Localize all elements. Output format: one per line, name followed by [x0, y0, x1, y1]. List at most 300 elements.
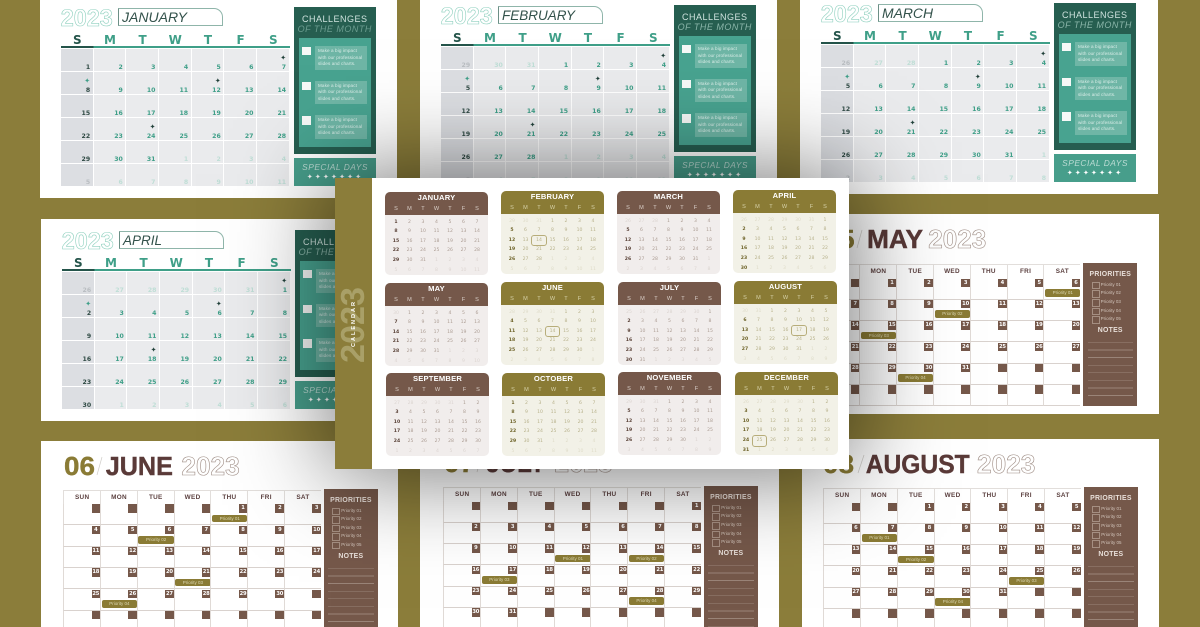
date grid: Priority 03: [1016, 578, 1037, 583]
mini calendar: December: 22: [811, 428, 816, 433]
date grid: 1: [120, 402, 124, 409]
mini calendar: June: 16: [577, 329, 582, 334]
date grid: 29: [889, 365, 895, 371]
mini calendar: September: 2: [409, 449, 412, 454]
mini calendar: April: 29: [782, 218, 787, 222]
mini calendar: January: 8: [435, 268, 438, 273]
mini calendar: June: 6: [538, 319, 540, 324]
date grid: Priority 02: [636, 556, 657, 561]
sidebar: challenges of the month: CHALLENGES: [682, 12, 748, 22]
mini calendar: July: 27: [653, 310, 659, 314]
mini calendar: November: 16: [680, 419, 686, 424]
mini calendar: May: 29: [407, 349, 412, 354]
mini calendar: November: W: [667, 386, 672, 392]
date grid: 6: [283, 402, 287, 409]
mini calendar: May: 10: [474, 359, 480, 364]
mini calendar: August: 23: [783, 337, 788, 342]
date grid: 24: [625, 131, 633, 138]
mini calendar: February: S: [591, 204, 595, 210]
date grid: 21: [889, 568, 896, 574]
weekday header: [443, 487, 701, 501]
date grid: 8: [241, 527, 245, 533]
mini calendar: October: 11: [551, 410, 556, 415]
panel: June calendar: [41, 441, 398, 627]
date grid: 10: [625, 177, 633, 184]
date grid: [63, 504, 321, 627]
special days box: [1054, 154, 1136, 182]
date grid: 31: [147, 156, 155, 163]
date grid: 28: [277, 133, 286, 140]
mini calendar: January: 10: [420, 229, 426, 234]
date grid: 6: [498, 177, 503, 184]
mini calendar: November: 24: [694, 428, 699, 433]
date grid: 14: [852, 322, 859, 328]
mini calendar: June: 17: [590, 329, 596, 334]
date grid: 27: [874, 60, 883, 67]
sidebar: challenges of the month: Make a big impact: [319, 306, 358, 311]
mini calendar: February: 16: [563, 238, 569, 243]
mini calendar: May: S: [394, 296, 398, 302]
date grid: 7: [531, 85, 535, 92]
sidebar: challenges of the month: OF THE MONTH: [1058, 20, 1132, 30]
sidebar: challenges of the month: with our professional: [698, 87, 742, 92]
mini calendar: October: 11: [591, 449, 597, 454]
mini calendar: April: 20: [795, 246, 801, 251]
mini calendar: November: 6: [668, 448, 671, 453]
mini calendar: August: 25: [810, 337, 815, 342]
mini calendar: June: 7: [578, 358, 581, 363]
date grid: 3: [629, 154, 633, 161]
mini calendar: June: 2: [511, 358, 513, 363]
date grid: 29: [926, 589, 933, 595]
mini calendar: February: 11: [590, 267, 596, 272]
date grid: 30: [963, 589, 970, 595]
mini calendar: September: 11: [408, 420, 413, 425]
sidebar: challenges of the month: CHALLENGES: [1062, 10, 1128, 20]
date grid: 4: [1001, 280, 1004, 286]
mini calendar: October: 27: [578, 429, 583, 434]
mini calendar: September: 6: [436, 410, 439, 415]
mini calendar: August: 20: [742, 337, 748, 342]
sidebar: challenges of the month: CHALLENGES: [302, 14, 368, 24]
weekday header: SUN: [75, 494, 89, 501]
mini calendar: February: F: [578, 204, 581, 210]
weekday header: T: [584, 31, 592, 45]
mini calendar: March: 23: [679, 247, 685, 252]
mini calendar: December: 24: [743, 438, 749, 443]
date grid: 11: [657, 177, 666, 184]
date grid: 2: [596, 62, 601, 69]
date grid: 10: [962, 301, 969, 307]
mini calendar: June: 4: [538, 358, 540, 363]
date grid: 8: [184, 179, 188, 186]
mini calendar: July: T: [681, 296, 685, 302]
date grid: 23: [963, 568, 970, 574]
date grid: 27: [874, 152, 883, 159]
mini calendar: July: S: [708, 296, 712, 302]
date grid: [443, 502, 701, 627]
mini calendar: May: 3: [476, 349, 478, 354]
weekday header: [823, 488, 1081, 502]
mini calendar: September: M: [408, 386, 413, 392]
date grid: 16: [83, 356, 91, 363]
mini calendar: March: 2: [627, 267, 629, 272]
weekday header: [74, 256, 279, 270]
date grid: 9: [216, 179, 221, 186]
mini calendar: January: 19: [447, 239, 453, 244]
mini calendar: November: 1: [668, 400, 671, 404]
mini calendar: November: NOVEMBER: [647, 373, 692, 382]
mini calendar: April: 6: [824, 266, 826, 271]
date grid: 14: [656, 545, 663, 551]
sidebar: challenges of the month: with our professional: [698, 122, 742, 127]
mini calendar: April: 22: [822, 246, 828, 251]
date grid: 4: [282, 156, 286, 163]
mini calendar: February: M: [523, 204, 528, 210]
date grid: 1: [695, 503, 698, 509]
panel: August calendar: [802, 439, 1159, 627]
mini calendar: December: 14: [797, 419, 803, 424]
mini calendar: November: 28: [653, 438, 659, 443]
mini calendar: December: 2: [826, 400, 828, 404]
mini calendar: June: 18: [509, 338, 515, 343]
date grid: 21: [852, 344, 859, 350]
mini calendar: December: 5: [772, 409, 774, 414]
mini calendar: March: 1: [708, 257, 710, 262]
mini calendar: February: 9: [565, 267, 567, 272]
mini calendar: July: 12: [667, 329, 672, 334]
date grid: ✦: [84, 77, 90, 85]
weekday header: SUN: [835, 492, 849, 499]
date grid: 19: [583, 567, 590, 573]
date grid: 9: [964, 525, 968, 531]
mini calendar: November: T: [654, 386, 658, 392]
date grid: 2: [216, 156, 221, 163]
mini calendar: October: 8: [552, 449, 555, 454]
date grid: 7: [853, 301, 857, 307]
date grid: 6: [854, 525, 858, 531]
mini calendar: April: 9: [742, 237, 746, 242]
weekday header: SAT: [296, 494, 310, 501]
date grid: 19: [212, 110, 221, 117]
sidebar: priorities and notes: Priority 01: [1101, 282, 1121, 287]
mini calendar: July: 20: [680, 338, 686, 343]
sidebar: challenges of the month: OF THE MONTH: [298, 24, 372, 34]
date grid: ✦: [1040, 50, 1046, 58]
mini calendar: October: 16: [524, 420, 529, 425]
date grid: Priority 01: [563, 556, 583, 561]
sidebar: challenges of the month: CHALLENGES: [303, 237, 369, 247]
mini calendar: June: 3: [592, 310, 594, 314]
date grid: 8: [944, 83, 948, 90]
sidebar: challenges of the month: slides and charts.: [698, 94, 736, 99]
mini calendar: July: 29: [707, 348, 713, 353]
mini calendar: March: 3: [694, 218, 697, 224]
date grid: 23: [972, 129, 981, 136]
mini calendar: April: 24: [755, 256, 760, 261]
date grid: 5: [466, 177, 470, 184]
date grid: 13: [213, 333, 222, 340]
mini calendar: March: 16: [679, 238, 685, 243]
date grid: ✦: [85, 300, 91, 308]
mini calendar: August: 8: [811, 357, 814, 362]
mini calendar: June: 21: [550, 338, 555, 343]
mini calendar: March: 14: [652, 238, 658, 243]
mini calendar: March: 31: [693, 257, 698, 262]
mini calendar: August: F: [811, 294, 814, 300]
date grid: 4: [94, 527, 98, 533]
mini calendar: May: 7: [435, 359, 438, 364]
date grid: 12: [462, 108, 470, 115]
date grid: 17: [625, 108, 633, 115]
sidebar: challenges of the month: slides and charts.: [318, 96, 356, 101]
mini calendar: June: 11: [509, 329, 515, 334]
mini calendar: April: 3: [756, 227, 759, 232]
sidebar: priorities and notes: [1083, 263, 1137, 406]
mini calendar: November: M: [640, 386, 645, 392]
mini calendar: April: 19: [782, 246, 787, 251]
date grid: 4: [548, 524, 551, 530]
mini calendar: June: 10: [590, 319, 596, 324]
mini calendar: November: 13: [640, 419, 645, 424]
mini calendar: October: W: [551, 386, 556, 392]
mini calendar: October: 28: [591, 429, 597, 434]
mini calendar: March: 30: [679, 257, 685, 262]
mini calendar: April: T: [796, 204, 800, 210]
mini calendar: September: T: [422, 386, 426, 392]
date grid: 8: [564, 85, 568, 92]
mini calendar: November: 4: [641, 448, 644, 453]
mini calendar: October: 3: [579, 439, 582, 444]
mini calendar: November: 5: [627, 409, 631, 414]
date grid: 18: [657, 108, 666, 115]
mini calendar: November: 26: [626, 438, 632, 443]
mini calendar: December: 12: [770, 419, 776, 424]
mini calendar: July: 21: [694, 338, 699, 343]
date grid: 28: [852, 365, 859, 371]
date grid: ✦: [464, 75, 470, 83]
mini calendar: November: 3: [695, 400, 698, 404]
mini calendar: August: 11: [810, 318, 815, 323]
mini calendar: June: 25: [509, 348, 515, 353]
sidebar: priorities and notes: PRIORITIES: [1090, 495, 1132, 502]
mini calendar: February: 10: [577, 228, 582, 233]
mini calendar: November: 1: [695, 438, 698, 443]
mini calendar: August: 7: [798, 357, 800, 362]
mini calendar: June: 2: [578, 310, 581, 314]
mini calendar: June: 28: [509, 310, 515, 314]
mini calendar: July: 10: [640, 329, 645, 334]
weekday header: S: [269, 33, 278, 47]
mini calendar: February: 2: [565, 257, 567, 262]
date grid: 29: [940, 152, 948, 159]
weekday header: T: [899, 29, 907, 43]
mini calendar: April: 18: [768, 246, 774, 251]
mini calendar: February: 30: [523, 218, 528, 224]
date grid: 1: [944, 60, 948, 67]
date grid: 7: [282, 64, 286, 71]
date grid: 26: [212, 133, 221, 140]
mini calendar: June: 3: [524, 358, 527, 363]
mini calendar: August: 26: [823, 337, 829, 342]
mini calendar: September: 1: [463, 400, 466, 406]
mini calendar: June: T: [564, 296, 568, 302]
sidebar: priorities and notes: Priority 02: [1101, 290, 1121, 295]
mini calendar: February: 3: [578, 257, 581, 262]
mini calendar: August: 10: [796, 318, 802, 323]
mini calendar: January: 4: [435, 220, 438, 224]
mini calendar: July: 11: [653, 329, 659, 334]
mini calendar: February: 31: [536, 218, 542, 224]
mini calendar: January: 15: [393, 239, 399, 244]
mini calendar: December: M: [757, 386, 762, 392]
mini calendar: December: 3: [744, 409, 748, 414]
date grid: 28: [889, 589, 896, 595]
date grid: 17: [147, 110, 155, 117]
sidebar: 2023 calendar spine: [335, 178, 372, 469]
mini calendar: April: 16: [741, 246, 747, 251]
date grid: 22: [889, 344, 895, 350]
mini calendar: March: 10: [693, 228, 698, 233]
mini calendar: August: T: [797, 294, 801, 300]
mini calendar: January: 1: [435, 258, 438, 263]
mini calendar: November: 20: [640, 428, 645, 433]
date grid: 25: [1037, 129, 1046, 136]
mini calendar: July: 23: [626, 348, 632, 353]
sidebar: challenges of the month: Make a big impact: [1078, 44, 1117, 49]
date grid: Priority 03: [489, 577, 509, 582]
mini calendar: April: APRIL: [773, 191, 796, 200]
date grid: 3: [629, 62, 633, 69]
mini calendar: June: 31: [550, 310, 555, 314]
mini calendar: June: 27: [536, 348, 542, 353]
mini calendar: August: AUGUST: [769, 282, 802, 291]
date grid: 16: [472, 567, 479, 573]
date grid: 8: [86, 87, 90, 94]
mini calendar: June: 9: [578, 319, 581, 324]
weekday header: FRI: [641, 491, 652, 498]
date grid: 28: [203, 591, 210, 597]
mini calendar: March: T: [680, 204, 684, 210]
mini calendar: December: 1: [812, 400, 815, 404]
date grid: 30: [472, 609, 479, 615]
sidebar: challenges of the month: with our professional: [318, 55, 362, 60]
sidebar: challenges of the month: slides and charts.: [319, 284, 357, 289]
date grid: 25: [1036, 568, 1043, 574]
mini calendar: April: T: [769, 204, 773, 210]
sidebar: challenges of the month: Make a big impact: [319, 271, 358, 276]
weekday header: TUE: [149, 494, 163, 501]
date grid: 5: [466, 85, 470, 92]
weekday header: M: [484, 31, 496, 45]
mini calendar: August: 30: [742, 308, 748, 314]
mini calendar: October: 26: [564, 429, 570, 434]
mini calendar: March: 7: [654, 228, 656, 233]
mini calendar: October: 10: [578, 449, 583, 454]
date grid: 1: [86, 64, 90, 71]
title: 06/JUNE 2023: 06: [64, 453, 95, 481]
mini calendar: September: 16: [475, 420, 481, 425]
mini calendar: February: S: [510, 204, 514, 210]
title: 08/AUGUST 2023: 2023: [977, 451, 1036, 479]
sidebar: priorities and notes: [1084, 487, 1138, 627]
date grid: 15: [82, 110, 90, 117]
date grid: 28: [907, 60, 915, 67]
date grid: 12: [1036, 301, 1043, 307]
date grid: Priority 02: [942, 311, 962, 316]
mini calendar: December: 26: [770, 438, 776, 443]
date grid: 7: [151, 179, 155, 186]
date grid: 23: [276, 569, 283, 575]
mini calendar: February: 11: [590, 228, 596, 233]
date grid: 8: [1042, 175, 1046, 182]
sidebar: priorities and notes: PRIORITIES: [710, 494, 752, 501]
date grid: Priority 04: [905, 375, 926, 380]
sidebar: priorities and notes: Priority 02: [341, 516, 361, 521]
mini calendar: July: T: [654, 296, 658, 302]
date grid: 26: [583, 588, 590, 594]
mini calendar: November: 5: [655, 448, 657, 453]
mini calendar: July: 2: [668, 358, 671, 363]
mini calendar: January: 1: [394, 220, 398, 224]
date grid: ✦: [660, 52, 666, 60]
mini calendar: May: 31: [434, 349, 439, 354]
mini calendar: July: 4: [655, 319, 657, 324]
sidebar: priorities and notes: [704, 486, 758, 627]
date grid: 5: [216, 64, 221, 71]
weekday header: THU: [982, 268, 996, 275]
date grid: 30: [925, 365, 932, 371]
mini calendar: September: 26: [421, 439, 427, 444]
date grid: 11: [657, 85, 666, 92]
date grid: 20: [874, 129, 883, 136]
mini calendar: January: M: [407, 206, 412, 212]
date grid: 1: [283, 287, 287, 294]
mini calendar: May: 13: [474, 320, 480, 325]
date grid: 17: [509, 567, 516, 573]
mini calendar: March: 4: [654, 267, 656, 272]
mini calendar: June: 29: [563, 348, 569, 353]
mini calendar: April: 2: [742, 227, 746, 232]
sidebar: priorities and notes: Priority 04: [1101, 308, 1121, 313]
title: 05/MAY 2023: MAY: [867, 226, 923, 254]
mini calendar: July: 19: [667, 338, 672, 343]
mini calendar: December: 17: [743, 428, 749, 433]
mini calendar: October: 22: [510, 429, 516, 434]
mini calendar: May: 2: [462, 349, 465, 354]
title: 07/JULY 2023: JULY: [487, 450, 546, 478]
mini calendar: May: 11: [447, 320, 453, 325]
date grid: 13: [166, 548, 173, 554]
mini calendar: October: 31: [537, 439, 543, 444]
date grid: 28: [527, 154, 535, 161]
mini calendar: September: S: [395, 386, 399, 392]
mini calendar: July: 3: [641, 319, 644, 324]
date grid: 11: [999, 301, 1006, 307]
date grid: 3: [1001, 504, 1005, 510]
mini calendar: December: 9: [826, 409, 828, 414]
mini calendar: May: 2: [422, 310, 424, 316]
date grid: 26: [1073, 568, 1080, 574]
mini calendar: September: W: [435, 386, 440, 392]
mini calendar: August: 19: [823, 328, 829, 333]
mini calendar: October: 13: [578, 410, 583, 415]
mini calendar: November: 10: [694, 409, 699, 414]
date grid: 15: [278, 333, 287, 340]
mini calendar: December: 6: [785, 409, 788, 414]
mini calendar: February: 5: [510, 228, 514, 233]
mini calendar: August: 18: [810, 328, 815, 333]
